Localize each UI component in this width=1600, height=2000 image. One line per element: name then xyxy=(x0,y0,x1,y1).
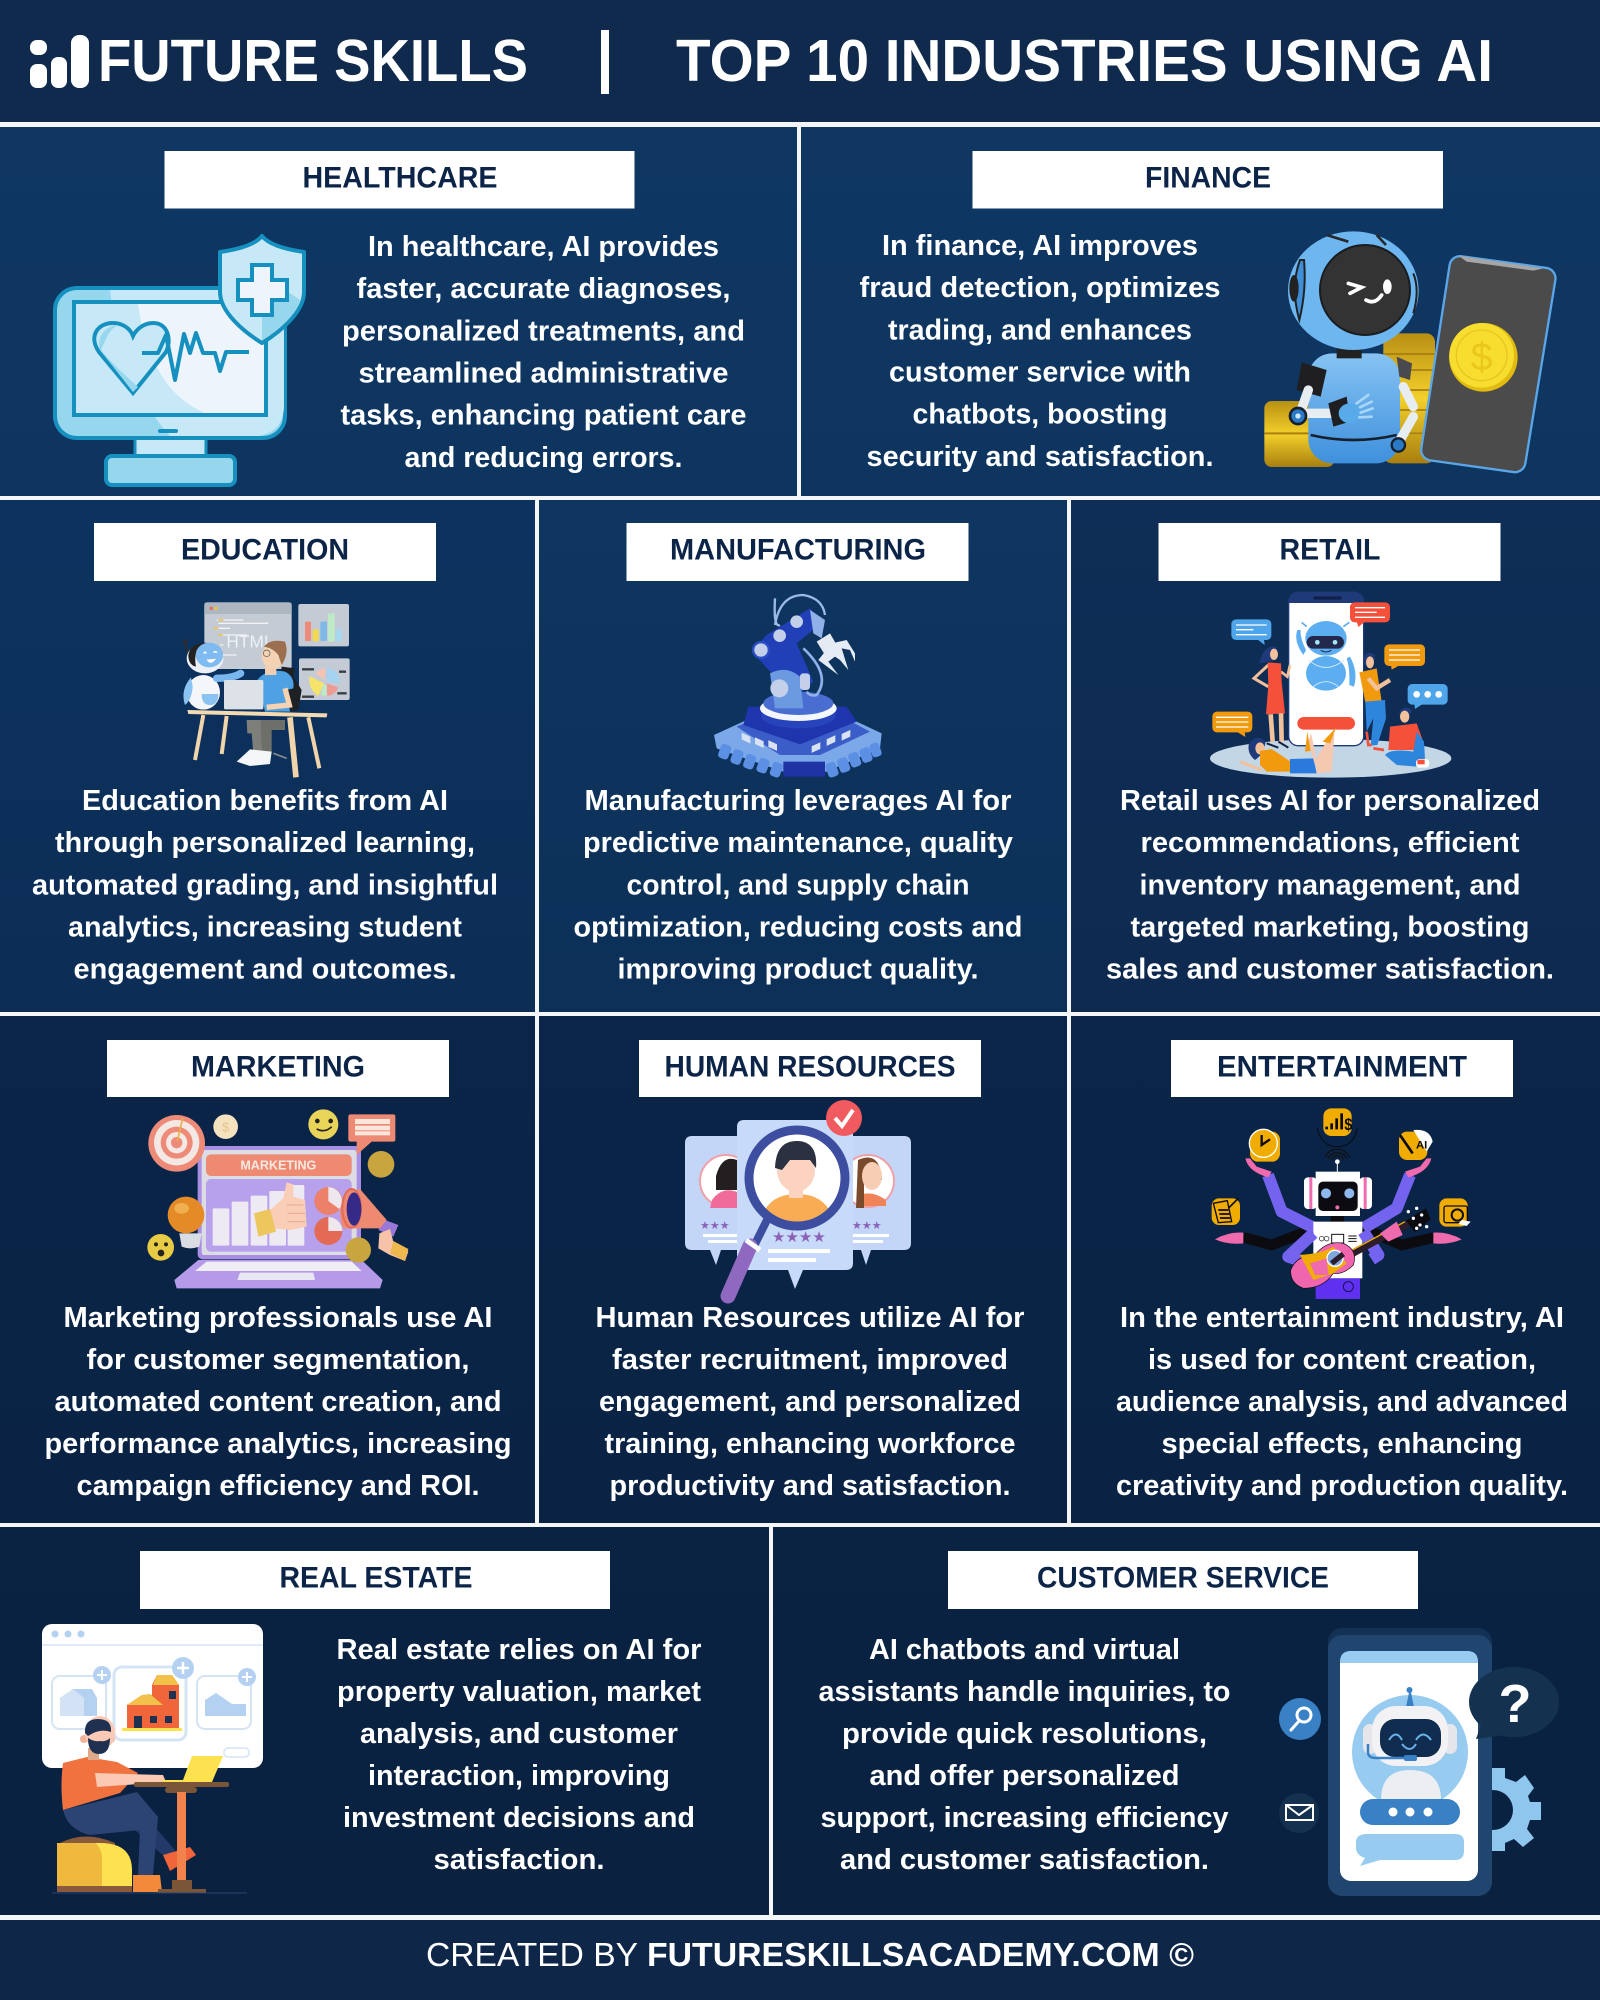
text: education description: analytics, increasing student xyxy=(68,912,462,944)
brand name: FUTURE SKILLS xyxy=(98,28,528,94)
text: finance description: security and satisfaction. xyxy=(866,441,1214,473)
text: manufacturing description: predictive maintenance, quality xyxy=(583,827,1013,859)
text: education description: through personalized learning, xyxy=(55,827,475,859)
panel: retail xyxy=(1071,500,1600,1012)
icon: chatbot on phone xyxy=(1279,1628,1559,1896)
footer credit: FUTURESKILLSACADEMY.COM © xyxy=(647,1936,1194,1973)
text: entertainment description: audience analysis, and advanced xyxy=(1116,1386,1568,1418)
heading: marketing: MARKETING xyxy=(191,1050,365,1084)
text: human resources description: training, enhancing workforce xyxy=(604,1428,1016,1460)
left candidate card: ★★★ xyxy=(700,1220,730,1232)
text: finance description: fraud detection, optimizes xyxy=(860,272,1220,304)
speech bubble xyxy=(348,1114,395,1155)
text: marketing description: for customer segmentation, xyxy=(86,1344,470,1376)
megaphone xyxy=(340,1189,408,1261)
heading: education xyxy=(94,523,436,581)
text: human resources description: faster recruitment, improved xyxy=(612,1344,1008,1376)
light bulb xyxy=(168,1197,204,1248)
text: marketing description: automated content creation, and xyxy=(54,1386,502,1418)
heading: human resources: HUMAN RESOURCES xyxy=(664,1050,956,1084)
icon: candidate cards with magnifier xyxy=(685,1100,911,1296)
text: retail description: recommendations, efficient xyxy=(1140,827,1520,859)
text: healthcare description: streamlined administrative xyxy=(358,358,728,390)
left candidate card xyxy=(685,1136,752,1265)
person at desk xyxy=(52,1716,247,1893)
orbiting icons: $ xyxy=(1344,1115,1353,1134)
text: finance description: customer service with xyxy=(889,356,1191,388)
text: customer service description xyxy=(818,1634,1230,1876)
orbiting icons: AI xyxy=(1416,1139,1427,1151)
pie charts xyxy=(314,1187,342,1245)
heading: real estate: REAL ESTATE xyxy=(280,1562,472,1594)
header banner xyxy=(0,0,1600,122)
text: human resources description: productivity and satisfaction. xyxy=(610,1470,1010,1502)
icon: shoppers around phone with chatbot xyxy=(1210,592,1451,778)
heading: finance: FINANCE xyxy=(1145,162,1271,194)
mail badge xyxy=(1279,1793,1319,1833)
panel: marketing xyxy=(0,1016,535,1523)
thumbs up xyxy=(254,1182,307,1237)
text: manufacturing description: optimization, reducing costs and xyxy=(574,912,1022,944)
icon: robot with coins and phone xyxy=(1264,231,1545,467)
heading: real estate xyxy=(140,1551,610,1609)
gear xyxy=(1486,1768,1541,1851)
text: real estate description: property valuation, market xyxy=(337,1676,701,1708)
text: entertainment description: special effects, enhancing xyxy=(1162,1428,1522,1460)
text: marketing description: performance analytics, increasing xyxy=(44,1428,512,1460)
phone with dollar coin xyxy=(1432,256,1545,462)
phone with dollar coin: $ xyxy=(1471,335,1493,379)
text: healthcare description: tasks, enhancing patient care xyxy=(340,400,746,432)
icon: robotic arm xyxy=(714,595,883,778)
icon: marketing laptop: $ xyxy=(222,1121,229,1135)
text: retail description: sales and customer satisfaction. xyxy=(1106,954,1554,986)
heading: entertainment xyxy=(1171,1040,1513,1097)
text: marketing description: Marketing professionals use AI xyxy=(64,1302,493,1334)
text: human resources description: engagement, and personalized xyxy=(599,1386,1021,1418)
text: healthcare description: personalized treatments, and xyxy=(342,316,745,348)
text: retail description: targeted marketing, boosting xyxy=(1130,912,1530,944)
text: healthcare description: faster, accurate diagnoses, xyxy=(356,273,730,305)
heading: healthcare: HEALTHCARE xyxy=(302,162,498,194)
text: entertainment description: is used for content creation, xyxy=(1148,1344,1536,1376)
heading: manufacturing xyxy=(626,523,968,581)
icon: marketing laptop: MARKETING xyxy=(240,1158,316,1172)
footer credit: CREATED BY xyxy=(426,1936,638,1973)
heading: customer service: CUSTOMER SERVICE xyxy=(1037,1562,1329,1594)
text: human resources description: Human Resources utilize AI for xyxy=(596,1302,1024,1334)
text: entertainment description xyxy=(1116,1302,1568,1502)
right candidate card xyxy=(842,1136,911,1265)
text: education description: Education benefits from AI xyxy=(82,785,448,817)
text: healthcare description: In healthcare, AI provides xyxy=(368,231,719,263)
text: manufacturing description: control, and supply chain xyxy=(626,870,970,902)
text: customer service description: and offer personalized xyxy=(870,1760,1180,1792)
text: human resources description xyxy=(596,1302,1024,1502)
heading: customer service xyxy=(948,1551,1418,1609)
orbiting icons xyxy=(1212,1108,1471,1227)
text: education description xyxy=(32,785,498,986)
heading: marketing xyxy=(107,1040,449,1097)
guitar xyxy=(1291,1207,1431,1288)
text: marketing description xyxy=(44,1302,512,1502)
text: real estate description: Real estate relies on AI for xyxy=(336,1634,702,1666)
text: retail description: Retail uses AI for personalized xyxy=(1120,785,1540,817)
text: real estate description xyxy=(336,1634,702,1876)
text: healthcare description: and reducing errors. xyxy=(404,442,682,474)
text: finance description xyxy=(860,230,1220,473)
right candidate card: ★★★ xyxy=(852,1220,882,1232)
icon: person browsing property listings xyxy=(42,1624,263,1893)
magnifier xyxy=(728,1130,845,1296)
heading: healthcare xyxy=(164,151,634,208)
text: real estate description: interaction, improving xyxy=(368,1760,670,1792)
text: healthcare description xyxy=(340,231,746,474)
speech bubbles xyxy=(1212,602,1448,737)
hands xyxy=(1215,1158,1462,1244)
target xyxy=(148,1115,205,1172)
text: entertainment description: creativity and production quality. xyxy=(1116,1470,1568,1502)
robot xyxy=(183,639,241,710)
chatbot xyxy=(1296,621,1355,691)
text: retail description: inventory management, and xyxy=(1140,870,1520,902)
footer xyxy=(0,1920,1600,2000)
student xyxy=(224,641,302,766)
icon: student and robot at desk: HTML xyxy=(226,631,274,651)
question bubble: ? xyxy=(1498,1674,1532,1734)
panel: healthcare xyxy=(0,127,797,496)
text: finance description: chatbots, boosting xyxy=(912,398,1168,430)
panel: customer service xyxy=(773,1527,1600,1915)
panel: education xyxy=(0,500,535,1012)
coin stacks xyxy=(1264,333,1435,467)
text: finance description: trading, and enhances xyxy=(888,314,1192,346)
header divider xyxy=(601,30,609,94)
icon: student and robot at desk xyxy=(183,602,350,777)
text: customer service description: assistants handle inquiries, to xyxy=(818,1676,1230,1708)
check badge xyxy=(826,1100,862,1136)
heading: human resources xyxy=(639,1040,981,1097)
smiley xyxy=(308,1109,338,1139)
text: manufacturing description: improving product quality. xyxy=(618,954,978,986)
robot body xyxy=(1304,1149,1372,1299)
heading: manufacturing: MANUFACTURING xyxy=(670,534,926,566)
text: customer service description: and customer satisfaction. xyxy=(840,1844,1209,1876)
text: customer service description: support, increasing efficiency xyxy=(820,1802,1228,1834)
icon: marketing laptop xyxy=(147,1109,408,1288)
text: manufacturing description: Manufacturing leverages AI for xyxy=(584,785,1012,817)
text: manufacturing description xyxy=(574,785,1022,986)
panel: finance xyxy=(801,127,1600,496)
panel: real estate xyxy=(0,1527,769,1915)
text: entertainment description: In the entertainment industry, AI xyxy=(1120,1302,1564,1334)
question bubble xyxy=(1469,1667,1559,1739)
icon: medical monitor with heart and shield xyxy=(55,236,304,485)
icon: multi-armed robot with guitar xyxy=(1212,1108,1471,1299)
title: TOP 10 INDUSTRIES USING AI xyxy=(676,28,1493,94)
main candidate card xyxy=(737,1120,853,1289)
robot xyxy=(1288,231,1419,463)
text: real estate description: investment decisions and xyxy=(343,1802,695,1834)
panel: entertainment xyxy=(1071,1016,1600,1523)
heading: retail: RETAIL xyxy=(1280,534,1380,566)
heading: education: EDUCATION xyxy=(181,534,349,566)
text: retail description xyxy=(1106,785,1554,986)
icon: future skills logo xyxy=(30,35,89,88)
text: finance description: In finance, AI improves xyxy=(882,230,1198,262)
text: marketing description: campaign efficiency and ROI. xyxy=(76,1470,480,1502)
text: real estate description: satisfaction. xyxy=(434,1844,604,1876)
shoppers xyxy=(1240,647,1429,773)
text: customer service description: provide quick resolutions, xyxy=(842,1718,1207,1750)
panel: human resources xyxy=(539,1016,1067,1523)
icon: candidate cards with magnifier: ★★★★ xyxy=(772,1229,826,1246)
panel: manufacturing xyxy=(539,500,1067,1012)
search badge xyxy=(1279,1698,1321,1740)
text: education description: engagement and outcomes. xyxy=(74,954,456,986)
heading: entertainment: ENTERTAINMENT xyxy=(1217,1050,1467,1084)
text: customer service description: AI chatbots and virtual xyxy=(869,1634,1180,1666)
heading: retail xyxy=(1158,523,1500,581)
footer credit xyxy=(426,1936,1194,1973)
text: education description: automated grading, and insightful xyxy=(32,870,498,902)
heading: finance xyxy=(972,151,1443,208)
text: real estate description: analysis, and customer xyxy=(360,1718,678,1750)
